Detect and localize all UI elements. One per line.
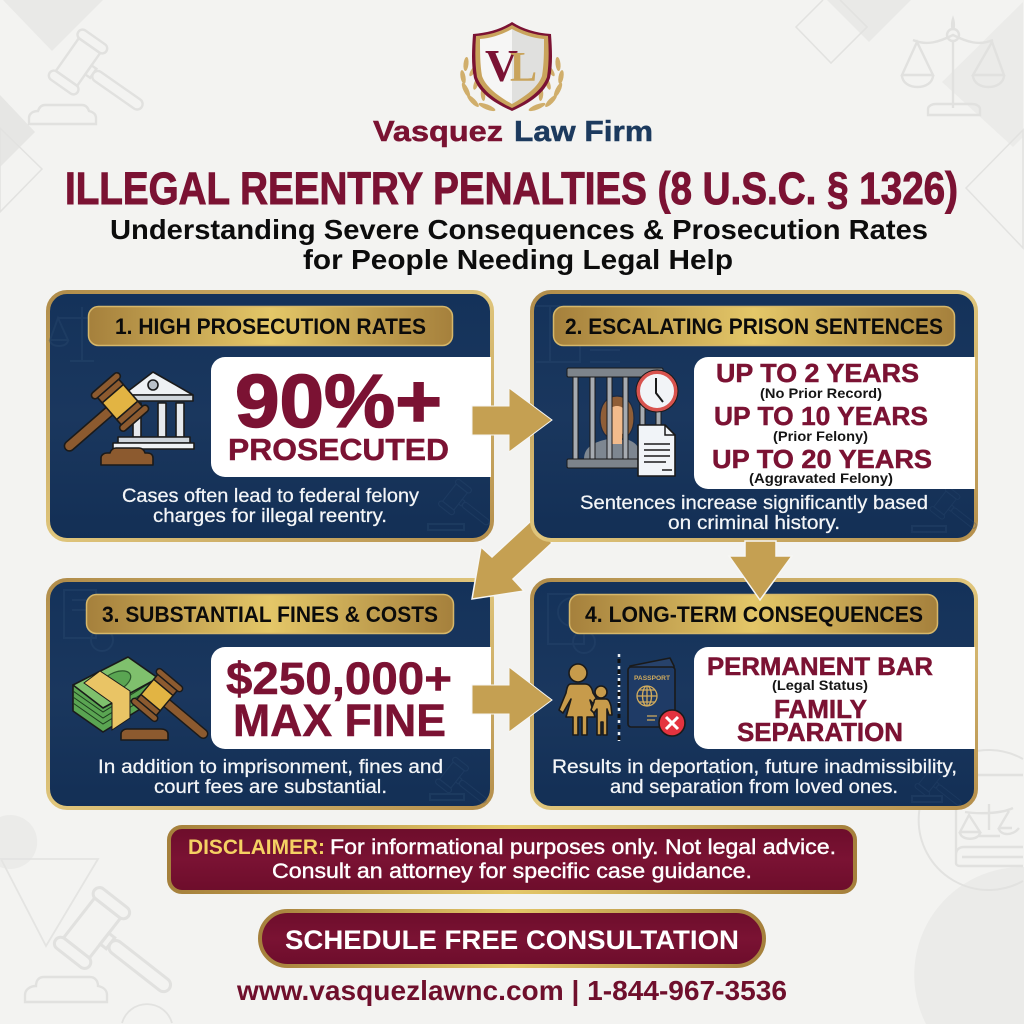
heading pill: 3. SUBSTANTIAL FINES & COSTS (102, 602, 438, 627)
heading pill: 1. HIGH PROSECUTION RATES (115, 314, 426, 339)
disclaimer: For informational purposes only. Not legal advice. (330, 836, 836, 859)
background icon: gavel bottom-left (25, 885, 193, 1018)
heading pill: 2. ESCALATING PRISON SENTENCES (565, 314, 943, 339)
status card: FAMILY (774, 694, 867, 724)
sentence card: UP TO 2 YEARS (716, 358, 919, 388)
icon: money stack and gavel (73, 657, 221, 754)
sentence card: (No Prior Record) (760, 385, 882, 401)
stat card: $250,000+ (226, 653, 452, 704)
status card: PERMANENT BAR (707, 653, 933, 681)
arrow: panel 3 to panel 4 (472, 667, 552, 732)
arrow: panel 1 to panel 2 (472, 388, 552, 452)
icon: family, barrier and cancelled passport (559, 654, 685, 742)
heading pill: 4. LONG-TERM CONSEQUENCES (585, 602, 923, 627)
status card (694, 647, 975, 749)
status card: (Legal Status) (772, 677, 868, 693)
status card: SEPARATION (737, 717, 903, 747)
logo shield (472, 22, 552, 111)
logo laurel wreath (459, 57, 565, 113)
disclaimer: Consult an attorney for specific case guidance. (272, 860, 752, 883)
stat card: PROSECUTED (228, 432, 449, 467)
logo shield: V (485, 40, 518, 91)
contact line: www.vasquezlawnc.com | 1-844-967-3536 (236, 975, 787, 1006)
background icon: gavel top-left (29, 28, 159, 131)
disclaimer (169, 827, 855, 892)
panel: 1. high prosecution rates (48, 292, 499, 540)
subtitle: for People Needing Legal Help (303, 244, 733, 275)
sentence card: UP TO 20 YEARS (712, 444, 932, 474)
panel: 4. long-term consequences (532, 580, 976, 816)
stat card (211, 647, 491, 749)
caption: In addition to imprisonment, fines and (98, 757, 443, 778)
stat card: 90%+ (235, 359, 442, 443)
background icon: law book with scales (956, 775, 1023, 866)
caption (98, 757, 443, 798)
stat card (211, 357, 491, 477)
heading pill (88, 306, 452, 346)
logo wordmark: Vasquez (373, 116, 503, 148)
disclaimer: DISCLAIMER: (188, 836, 325, 859)
call to action button (260, 911, 764, 966)
subtitle: Understanding Severe Consequences & Prosecution Rates (110, 214, 928, 245)
panel: 2. escalating prison sentences (532, 292, 985, 540)
sentence card (694, 357, 975, 489)
sentence card: (Prior Felony) (773, 428, 868, 444)
call to action button: SCHEDULE FREE CONSULTATION (285, 925, 739, 955)
heading pill (554, 306, 954, 346)
caption (552, 757, 957, 798)
caption: on criminal history. (668, 513, 840, 534)
icon: courthouse and gavel (49, 371, 194, 468)
caption: Cases often lead to federal felony (122, 486, 420, 507)
stat card: MAX FINE (233, 695, 446, 746)
panel: 3. substantial fines and costs (48, 580, 496, 814)
caption: court fees are substantial. (154, 777, 387, 798)
caption: Results in deportation, future inadmissibility, (552, 757, 957, 778)
arrow: panel 2 to panel 3 (472, 520, 552, 599)
caption: and separation from loved ones. (610, 777, 898, 798)
logo shield: L (510, 45, 537, 91)
logo wordmark: Law Firm (514, 116, 653, 148)
logo wordmark (373, 116, 653, 148)
icon: prisoner behind bars with clock and document (567, 368, 678, 476)
caption (580, 493, 928, 534)
logo: Vasquez Law Firm (373, 22, 653, 148)
caption: charges for illegal reentry. (153, 506, 387, 527)
heading pill (86, 594, 454, 634)
icon: family, barrier and cancelled passport: PASSPORT (634, 675, 670, 682)
sentence card: (Aggravated Felony) (749, 470, 893, 486)
background icon: scales top-right (902, 19, 1004, 115)
heading pill (570, 594, 938, 634)
arrow: panel 2 to panel 4 (729, 541, 792, 600)
sentence card: UP TO 10 YEARS (714, 401, 928, 431)
caption (122, 486, 420, 527)
subtitle (110, 214, 928, 275)
caption: Sentences increase significantly based (580, 493, 928, 514)
